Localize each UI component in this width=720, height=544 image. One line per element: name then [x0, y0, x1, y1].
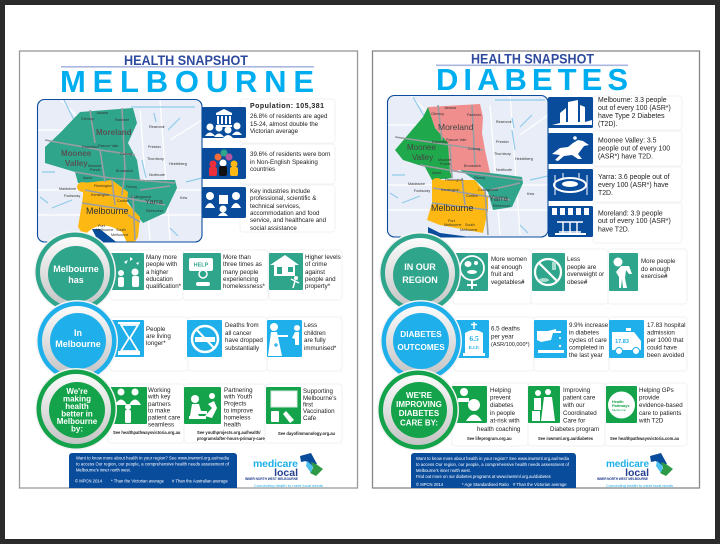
map labels: Maidstone: [59, 187, 76, 191]
map labels: Ponds: [440, 162, 451, 166]
map labels: Carlton: [117, 199, 129, 203]
stat: Yarra prevalence: every 100 (ASR*) have: [598, 182, 669, 189]
icon: immunisation: [267, 320, 302, 357]
map labels: Melbourne: [96, 228, 113, 232]
stat: Moreland prevalence: Moreland: 3.9 people: [598, 210, 663, 218]
map labels: Brunswick: [116, 169, 133, 173]
icon: exercise: [609, 253, 638, 291]
logo: Medicare Local: local: [274, 467, 298, 479]
icon: health coaching: [452, 386, 487, 423]
footer: Diabetes notes: © MPCN 2014: [416, 482, 444, 487]
row: diabetes outcomes: admission: [647, 330, 675, 336]
row: Melbourne has: [110, 250, 342, 300]
stat: key industries: social assistance: [250, 225, 297, 232]
stat: population: Victorian average: [250, 128, 299, 135]
icon: house and thief: [269, 253, 303, 290]
stat: Melbourne prevalence: Melbourne: 3.3 people: [598, 97, 667, 104]
row: In Melbourne: Deaths from: [225, 322, 259, 329]
icon: gravestone: 6.5: [469, 334, 479, 343]
badge: We're making health better: Melbourne: [57, 417, 98, 426]
row: in our region: do enough: [641, 266, 671, 273]
map labels: Flemington: [445, 178, 463, 182]
row: diabetes outcomes: in diabetes: [569, 330, 599, 336]
row: improving diabetes care: care to patients: [639, 410, 681, 417]
row: Melbourne has: against: [305, 269, 325, 276]
row: diabetes outcomes: 17.83 hospital: [647, 322, 686, 329]
heading: Health Snapshot: HEALTH SNAPSHOT: [124, 53, 249, 68]
icon: youth care: [184, 387, 221, 424]
map labels: Coburg: [120, 152, 132, 156]
map labels: Thornbury: [494, 152, 511, 156]
badge: in our region: [379, 232, 461, 314]
badge: In Melbourne: Melbourne: [55, 339, 101, 349]
row: making health better: with Youth: [223, 394, 253, 400]
badge: In Melbourne: [36, 300, 118, 382]
footer: Melbourne notes: * Than the Victorian average: [111, 478, 165, 484]
badge: We're making health better: We're: [66, 387, 88, 396]
row: making health better: health: [224, 422, 241, 428]
heading: Health Snapshot: HEALTH SNAPSHOT: [471, 52, 595, 66]
row: improving diabetes care: with T2D: [638, 418, 664, 424]
map labels: Pascoe Vale: [98, 144, 118, 148]
row: diabetes outcomes: cycles of care: [569, 337, 607, 344]
map labels: Preston: [148, 145, 161, 149]
row: in our region: Less: [567, 256, 580, 263]
icon: cafe: [548, 206, 593, 237]
badge: Melbourne has: Melbourne: [53, 264, 99, 274]
map labels: Moreland: [438, 122, 474, 132]
row: improving diabetes care: See lifeprogram.org.au: [467, 436, 512, 441]
stat: Yarra prevalence: [548, 167, 682, 202]
row: diabetes outcomes: 6.5 deaths: [491, 326, 520, 332]
map labels: Richmond: [146, 209, 163, 213]
badge: improving diabetes care: DIABETES: [399, 409, 440, 418]
footer: Diabetes notes: Melbourne's inner north west.: [416, 468, 471, 473]
stat: Melbourne prevalence: have Type 2 Diabetes: [598, 113, 665, 120]
stat: population: [202, 99, 335, 143]
icon: partners: [108, 387, 147, 424]
row: improving diabetes care: Helping: [490, 387, 512, 394]
map labels: Kew: [527, 192, 535, 196]
map labels: Heidelberg: [169, 162, 187, 166]
map labels: Northcote: [496, 168, 512, 172]
map labels: Footscray: [64, 194, 80, 198]
logo: Medicare Local: medicare: [253, 458, 298, 470]
stat: population: 15-24, almost double the: [250, 121, 319, 128]
stat: population: 26.8% of residents are aged: [250, 113, 328, 120]
icon: Health Pathways: Health: [612, 400, 624, 404]
icon: ambulance: 17.83: [615, 339, 629, 345]
map labels: Maidstone: [408, 182, 425, 186]
logo: Medicare Local: local: [625, 467, 649, 479]
row: making health better: Melbourne's: [303, 395, 337, 402]
stat: Melbourne prevalence: out of every 100 (ASR*): [598, 105, 671, 112]
footer: Diabetes notes: to access Our region, our people, a comprehensive health needs assessment of: [416, 462, 570, 467]
row: improving diabetes care: at-risk with: [490, 418, 520, 424]
map labels: Coburg: [468, 147, 480, 151]
stat: Moreland prevalence: [548, 203, 682, 243]
stat: Moonee Valley prevalence: people out of every 100: [598, 146, 670, 152]
badge: We're making health better: health: [65, 402, 89, 411]
map labels: Jacana: [444, 106, 457, 110]
stat: language: [202, 144, 335, 184]
map labels: Moreland: [96, 128, 132, 137]
icon: finger prick test: [534, 320, 567, 358]
row: In Melbourne: Less: [304, 322, 317, 329]
footer: Melbourne notes: Want to know more about health in your region? See www.inwmml.org.au/media: [76, 456, 230, 460]
logo: Medicare Local: INNER NORTH WEST MELBOURNE: [597, 477, 648, 481]
row: making health better: to improve: [224, 408, 253, 414]
row: making health better: Partnering: [224, 387, 253, 394]
row: diabetes outcomes: could have: [647, 344, 677, 352]
icon: no junk food: [532, 253, 565, 291]
map labels: Melbourne: [444, 223, 461, 227]
row: in our region: exercise#: [641, 273, 668, 280]
icon: Health Pathways: [606, 386, 637, 423]
map labels: Jacana: [96, 111, 109, 115]
row: improving diabetes care: in people: [490, 410, 516, 417]
map labels: Carlton: [466, 194, 478, 198]
row: in our region: overweight or: [567, 271, 604, 278]
title: Diabetes: DIABETES: [436, 62, 628, 97]
map labels: Fawkner: [115, 118, 130, 122]
map labels: Ascot: [83, 176, 92, 180]
badge: improving diabetes care: [377, 369, 459, 451]
row: Melbourne has: experiencing: [223, 276, 259, 283]
row: improving diabetes care: provide: [639, 394, 660, 402]
stat: Moreland prevalence: have T2D.: [598, 226, 630, 234]
row: In Melbourne: are fully: [304, 337, 327, 344]
map labels: Port: [448, 219, 455, 223]
map labels: Yarra: [145, 197, 164, 206]
map labels: Richmond: [493, 204, 510, 208]
map labels: Essendon: [432, 140, 448, 144]
row: In Melbourne: longer*: [146, 340, 166, 347]
logo: Medicare Local: INNER NORTH WEST MELBOURNE: [245, 477, 298, 481]
map labels: Thornbury: [147, 157, 164, 161]
row: making health better: Working: [148, 387, 171, 394]
stat: Yarra prevalence: Yarra: 3.6 people out of: [598, 174, 670, 181]
badge: in our region: IN OUR: [404, 262, 436, 272]
map labels: Fitzroy: [474, 176, 485, 180]
badge: improving diabetes care: WE'RE: [406, 391, 433, 400]
row: diabetes outcomes: per 1000 that: [647, 337, 684, 344]
map labels: Footscray: [414, 189, 430, 193]
stat: Yarra prevalence: T2D.: [598, 190, 613, 197]
row: Melbourne has: many people: [223, 269, 259, 276]
row: diabetes outcomes: the last year: [569, 352, 603, 359]
row: improving diabetes care: patient care: [563, 394, 596, 402]
stat: key industries: professional, scientific &: [250, 195, 317, 202]
icon: hourglass: [110, 320, 144, 357]
footer: Diabetes notes: [411, 453, 576, 488]
row: in our region: [453, 249, 687, 304]
row: Melbourne has: of crime: [305, 261, 328, 268]
map labels: Melbourne: [86, 206, 129, 216]
footer: Melbourne notes: © MPCN 2014: [75, 478, 103, 484]
stat: language: 39.6% of residents were born: [250, 151, 331, 158]
panel: Diabetes snapshot: [372, 51, 700, 488]
badge: We're making health better: [35, 368, 117, 450]
badge: diabetes outcomes: OUTCOMES: [397, 343, 445, 352]
row: Melbourne has: property*: [305, 283, 331, 290]
map labels: Kensington: [91, 193, 109, 197]
map labels: Port: [98, 224, 105, 228]
map labels: South: [465, 223, 475, 227]
row: diabetes outcomes: been avoided: [647, 352, 685, 359]
map labels: Moonee: [88, 164, 101, 168]
row: in our region: vegetables#: [491, 279, 525, 286]
stat: Moonee Valley prevalence: (ASR*) have T2D.: [598, 154, 653, 160]
row: making health better: with key: [147, 394, 171, 400]
stat: language: countries: [250, 166, 275, 173]
stat: Moreland prevalence: out of every 100 (ASR*): [598, 218, 671, 225]
footer: Diabetes notes: Want to know more about health in your region? See www.inwmml.org.au/media: [416, 456, 570, 461]
row: In Melbourne: are living: [146, 333, 171, 340]
badge: In Melbourne: In: [74, 328, 82, 338]
badge: We're making health better: making: [63, 394, 91, 404]
row: Melbourne has: homelessness*: [223, 283, 266, 290]
badge: Melbourne has: has: [68, 275, 84, 285]
icon: help sign: [183, 253, 221, 290]
row: diabetes outcomes: [454, 317, 687, 371]
row: Melbourne has: Higher levels: [305, 254, 341, 261]
map labels: Moonee: [438, 158, 451, 162]
map labels: Collingwood: [131, 195, 151, 199]
map labels: Ponds: [90, 168, 101, 172]
logo: Medicare Local: Connecting health to meet local needs: [254, 483, 323, 488]
icon: people in colours: [202, 148, 246, 179]
row: Melbourne has: people and: [305, 276, 336, 283]
row: diabetes outcomes: (ASR/100,000*): [491, 342, 530, 348]
row: improving diabetes care: Improving: [563, 387, 591, 394]
stat: key industries: Key industries include: [250, 188, 311, 195]
stat: key industries: technical services,: [250, 203, 301, 210]
icon: help sign: HELP: [194, 262, 209, 268]
row: diabetes outcomes: per year: [491, 334, 514, 340]
badge: diabetes outcomes: DIABETES: [400, 330, 442, 339]
row: Melbourne has: education: [146, 276, 173, 283]
row: Melbourne has: More than: [223, 254, 251, 261]
stat: Moonee Valley prevalence: [548, 131, 682, 166]
icon: ambulance: [609, 320, 644, 358]
stat: Melbourne prevalence: (T2D).: [598, 121, 618, 128]
row: making health better: partners: [148, 401, 171, 408]
row: making health better: to make: [148, 408, 171, 414]
icon: Health Pathways: Pathways: [612, 404, 630, 408]
badge: improving diabetes care: IMPROVING: [396, 400, 442, 409]
map labels: Moonee: [407, 143, 436, 152]
row: in our region: fruit and: [491, 271, 514, 278]
stat: key industries: service, and healthcare and: [250, 217, 327, 224]
row: making health better: Cafe: [303, 415, 317, 422]
map labels: Essendon: [82, 145, 98, 149]
row: making health better: first: [303, 402, 313, 408]
row: improving diabetes care: prevent: [490, 394, 511, 402]
map labels: Melbourne: [111, 233, 128, 237]
stat: population: Population: 105,381: [250, 103, 324, 110]
map labels: Glenroy: [431, 112, 444, 116]
row: improving diabetes care: See inwmml.org.au/diabetes: [538, 436, 594, 441]
row: improving diabetes care: health coaching: [477, 426, 521, 433]
icon: children: [110, 253, 144, 290]
row: making health better: Vaccination: [303, 408, 335, 415]
stat: key industries: [202, 185, 335, 232]
map labels: South: [116, 228, 126, 232]
row: in our region: eat enough: [491, 264, 523, 271]
icon: coordinated care: [528, 386, 560, 423]
row: in our region: obese#: [567, 279, 588, 286]
row: diabetes outcomes: completed in: [569, 344, 605, 352]
map labels: Melbourne: [460, 228, 477, 232]
row: In Melbourne: [110, 317, 342, 371]
map: Melbourne local areas: [37, 99, 202, 245]
map labels: Kew: [180, 196, 188, 200]
badge: improving diabetes care: CARE BY:: [400, 418, 438, 428]
map labels: Fitzroy: [126, 185, 137, 189]
map labels: Pascoe Vale: [446, 138, 466, 142]
logo: Medicare Local: [245, 453, 323, 488]
row: improving diabetes care: [452, 383, 687, 446]
icon: workers: [202, 187, 246, 218]
row: making health better: Projects: [224, 400, 246, 408]
panel: Melbourne snapshot: [20, 51, 358, 488]
footer: Diabetes notes: Find out more on our diabetes programs at www.inwmml.org.au/diabetes: [416, 474, 551, 479]
row: making health better: homeless: [224, 414, 250, 422]
icon: population: [202, 107, 246, 138]
badge: We're making health better: better in: [61, 410, 93, 418]
map labels: Heidelberg: [515, 157, 533, 161]
row: improving diabetes care: See healthpathwaysvictoria.com.au: [610, 436, 680, 441]
map labels: Valley: [412, 153, 433, 162]
map labels: Brunswick: [464, 164, 481, 168]
stat: Moonee Valley prevalence: Moonee Valley: 3.5: [598, 138, 657, 144]
map labels: Fawkner: [467, 113, 482, 117]
map labels: Melbourne: [431, 203, 474, 213]
map labels: Collingwood: [478, 188, 498, 192]
row: improving diabetes care: Diabetes program: [550, 426, 599, 433]
row: in our region: people are: [567, 264, 597, 271]
map labels: Valley: [65, 159, 88, 168]
icon: no smoking: [187, 320, 222, 357]
row: In Melbourne: have dropped: [225, 337, 263, 344]
footer: Melbourne notes: to access Our region, our people, a comprehensive health needs assessment of: [76, 462, 230, 466]
map labels: Northcote: [149, 173, 165, 177]
map labels: Flemington: [94, 184, 112, 188]
footer: Diabetes notes: # Than the Victorian average: [513, 482, 567, 487]
footer: Melbourne notes: # Than the Australian average: [172, 478, 228, 484]
map labels: Moonee: [61, 149, 92, 158]
row: improving diabetes care: diabetes: [490, 402, 513, 409]
map labels: [407, 106, 535, 232]
icon: gravestone: [454, 320, 489, 358]
row: improving diabetes care: Helping GPs: [639, 387, 674, 394]
row: in our region: More people: [641, 258, 676, 265]
footer: Diabetes notes: * Age Standardised Ratio: [462, 482, 509, 487]
row: making health better: Supporting: [303, 388, 333, 395]
row: Melbourne has: three times as: [223, 261, 262, 268]
map: diabetes prevalence by area: [387, 95, 548, 237]
footer: Melbourne notes: Melbourne's inner north west.: [76, 468, 131, 472]
row: making health better: See dayofimmunology.org.au: [278, 431, 336, 436]
row: improving diabetes care: Care for: [563, 418, 585, 424]
icon: gravestone: R.I.P.: [469, 345, 479, 350]
row: making health better: See healthpathwaysvictoria.org.au: [113, 430, 181, 435]
title: Melbourne: MELBOURNE: [60, 64, 314, 99]
row: making health better: programs/after-hours-primary-care: [197, 436, 266, 441]
map labels: Reservoir: [149, 125, 166, 129]
row: In Melbourne: People: [146, 326, 166, 333]
map labels: Reservoir: [496, 120, 513, 124]
row: making health better: See youthprojects.org.au/health/: [197, 430, 261, 435]
row: improving diabetes care: evidence-based: [639, 402, 683, 409]
badge: We're making health better: by:: [71, 424, 83, 434]
row: making health better: patient care: [148, 414, 181, 422]
badge: in our region: REGION: [402, 275, 438, 285]
row: improving diabetes care: Coordinated: [563, 410, 597, 417]
icon: Health Pathways: Melbourne: [612, 408, 627, 412]
map labels: Kensington: [441, 188, 459, 192]
row: In Melbourne: substantially: [225, 345, 260, 352]
map labels: Preston: [496, 140, 509, 144]
row: making health better: seamless: [148, 422, 174, 428]
footer: Melbourne notes: [69, 453, 237, 488]
row: Melbourne has: a higher: [146, 269, 168, 276]
badge: Melbourne has: [34, 231, 116, 313]
row: In Melbourne: immunised*: [304, 345, 337, 352]
icon: city buildings: [548, 97, 593, 128]
row: improving diabetes care: with our: [562, 402, 585, 409]
row: Melbourne has: people with: [146, 261, 178, 268]
map labels: Ascot: [432, 171, 441, 175]
map labels: [59, 111, 188, 237]
icon: racehorse: [548, 133, 593, 164]
icon: stadium: [548, 169, 593, 201]
icon: vaccination cafe: [266, 387, 301, 424]
logo: Medicare Local: medicare: [606, 459, 649, 470]
row: In Melbourne: all cancer: [225, 330, 251, 337]
row: Melbourne has: qualification*: [146, 283, 182, 290]
stat: Melbourne prevalence: [548, 96, 682, 130]
row: diabetes outcomes: 9.9% increase: [569, 322, 609, 329]
logo: Medicare Local: Connecting health to meet local needs: [606, 483, 673, 488]
map labels: Yarra: [489, 194, 509, 203]
row: In Melbourne: children: [304, 330, 326, 337]
badge: diabetes outcomes: [380, 300, 462, 382]
row: Melbourne has: Many more: [146, 254, 178, 261]
map labels: Glenroy: [81, 117, 94, 121]
row: making health better: [108, 384, 342, 443]
logo: Medicare Local: [597, 453, 673, 488]
icon: female symbol with food: [453, 253, 488, 291]
stat: key industries: accommodation and food: [250, 210, 320, 217]
row: in our region: More women: [491, 256, 527, 263]
stat: language: in Non-English Speaking: [250, 159, 318, 166]
